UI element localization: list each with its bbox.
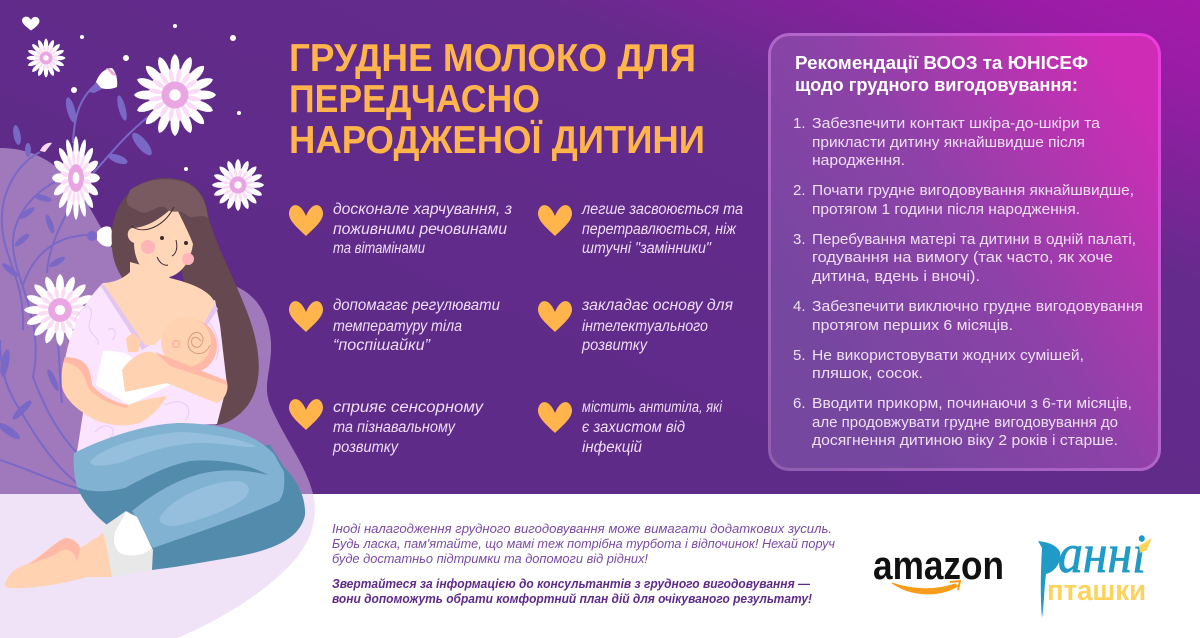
benefit: regulates temperature: допомагає регулювати	[333, 297, 500, 314]
recommendation list	[793, 115, 1143, 449]
title: НАРОДЖЕНОЇ ДИТИНИ	[289, 119, 705, 162]
logo: Ранні пташки	[1038, 523, 1152, 618]
recommendation list: протягом перших 6 місяців.	[812, 317, 1013, 334]
benefit: easy to digest	[538, 201, 743, 257]
recommendation list: Забезпечити виключно грудне вигодовування	[812, 298, 1143, 315]
decorative heart and dots	[22, 17, 241, 171]
white footer band	[0, 494, 1200, 638]
foot	[5, 533, 113, 588]
benefit: easy to digest: штучні "замінники"	[582, 240, 712, 257]
jeans upper thigh	[74, 423, 277, 491]
recommendation list: але продовжувати грудне вигодовування до	[812, 414, 1118, 431]
recommendation list: народження.	[812, 152, 905, 169]
benefit: easy to digest: легше засвоюється та	[581, 201, 743, 218]
footer note: буде достатньо підтримки та допомоги від рідних!	[332, 551, 648, 566]
back cushion	[205, 287, 271, 425]
flower stems and leaves	[0, 85, 155, 488]
recommendation list: 5.	[793, 347, 806, 364]
recommendation list: 2.	[793, 182, 806, 199]
recommendation list: протягом 1 години після народження.	[812, 201, 1080, 218]
dress	[65, 283, 227, 452]
recommendation list: пляшок, сосок.	[812, 365, 923, 382]
logo: amazon: amazon	[873, 544, 1004, 588]
panel: WHO and UNICEF recommendations	[770, 34, 1160, 470]
recommendation list: дитина, вдень і вночі).	[812, 268, 980, 285]
jeans highlights	[90, 432, 256, 466]
benefit: intellectual development: розвитку	[581, 337, 648, 354]
benefit: easy to digest: перетравлюється, ніж	[582, 221, 737, 238]
footer note: Іноді налагодження грудного вигодовування може вимагати додаткових зусиль.	[332, 521, 832, 536]
illustration: breastfeeding mother	[5, 178, 305, 588]
benefit: perfect nutrition: та вітамінами	[333, 240, 425, 257]
title: ПЕРЕДЧАСНО	[289, 78, 540, 121]
facial features	[131, 207, 194, 265]
arm left	[62, 357, 167, 425]
logo: Ранні пташки: анні	[1058, 523, 1146, 584]
benefit: perfect nutrition: досконале харчування, з	[333, 201, 512, 218]
benefit: regulates temperature: температуру тіла	[333, 318, 462, 335]
benefit: sensory development: сприяє сенсорному	[333, 399, 484, 416]
recommendation list: Почати грудне вигодовування якнайшвидше,	[812, 182, 1134, 199]
benefit: sensory development: розвитку	[332, 439, 399, 456]
recommendation list: годування на вимогу (так часто, як хоче	[812, 249, 1113, 266]
benefit: regulates temperature: “поспішайки”	[333, 337, 431, 354]
flowers	[9, 30, 275, 361]
benefit: intellectual development: інтелектуального	[582, 318, 708, 335]
benefit: regulates temperature	[289, 297, 500, 354]
trouser cuff	[103, 511, 153, 577]
benefit: intellectual development	[538, 297, 733, 354]
benefit: antibodies: є захистом від	[582, 419, 685, 436]
benefit: perfect nutrition: поживними речовинами	[333, 221, 507, 238]
benefit: sensory development: та пізнавальному	[333, 419, 456, 436]
panel heading: щодо грудного вигодовування:	[795, 74, 1078, 95]
benefit: antibodies: містить антитіла, які	[582, 399, 722, 416]
jeans lower	[77, 445, 305, 570]
neck and chest	[103, 262, 215, 345]
title	[289, 37, 705, 162]
footer note: Будь ласка, пам'ятайте, що мамі теж потрібна турбота і відпочинок! Нехай поруч	[332, 536, 835, 551]
dress collar	[100, 283, 218, 350]
pale lilac floor blob	[0, 494, 315, 638]
recommendation list: прикласти дитину якнайшвидше після	[812, 134, 1085, 151]
benefit: intellectual development: закладає основу для	[581, 297, 733, 314]
arm left shadow	[64, 357, 128, 408]
blanket	[96, 351, 170, 405]
arm right	[122, 352, 228, 403]
benefit: antibodies	[538, 399, 722, 456]
benefit: sensory development	[289, 399, 484, 456]
jeans shin	[132, 458, 284, 548]
purple gradient background	[0, 0, 1200, 494]
recommendation list: 1.	[793, 115, 806, 132]
baby head	[161, 317, 217, 373]
panel heading: Рекомендації ВООЗ та ЮНІСЕФ	[795, 52, 1088, 73]
logo: Ранні пташки: пташки	[1047, 575, 1146, 607]
recommendation list: 3.	[793, 231, 806, 248]
baby hand	[126, 333, 141, 352]
title: ГРУДНЕ МОЛОКО ДЛЯ	[289, 37, 696, 80]
recommendation list: досягнення дитиною віку 2 років і старше.	[812, 432, 1118, 449]
face	[128, 205, 193, 278]
footer call to action	[332, 576, 813, 606]
recommendation list: Забезпечити контакт шкіра-до-шкіри та	[812, 115, 1101, 132]
benefit: perfect nutrition	[289, 201, 512, 257]
dress swirls	[75, 307, 218, 438]
footer call to action: вони допоможуть обрати комфортний план дій для очікуваного результату!	[332, 591, 813, 606]
hair top	[127, 179, 208, 218]
footer note	[332, 521, 835, 566]
long hair	[112, 178, 259, 425]
footer call to action: Звертайтеся за інформацією до консультантів з грудного вигодовування —	[332, 576, 811, 591]
benefit: antibodies: інфекцій	[582, 439, 642, 456]
recommendation list: Перебування матері та дитини в одній палаті,	[812, 231, 1136, 248]
recommendation list: Вводити прикорм, починаючи з 6-ти місяців,	[812, 395, 1132, 412]
recommendation list: 4.	[793, 298, 806, 315]
recommendation list: Не використовувати жодних сумішей,	[812, 347, 1084, 364]
lilac backdrop blob	[0, 148, 313, 494]
recommendation list: 6.	[793, 395, 806, 412]
panel heading	[795, 52, 1088, 95]
